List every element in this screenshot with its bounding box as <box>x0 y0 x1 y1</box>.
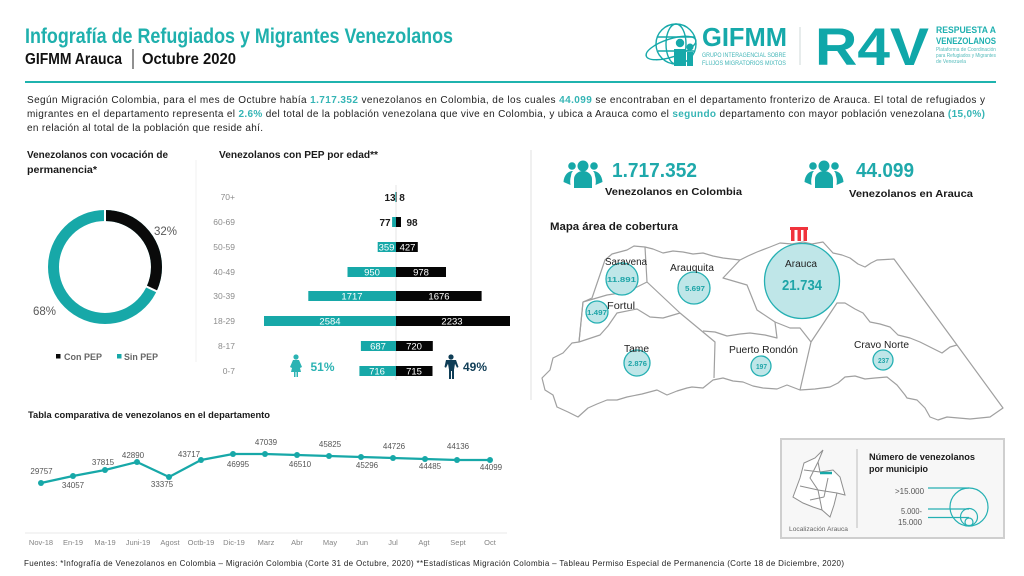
panel: tabla comparativa line chart <box>25 410 507 547</box>
x axis labels: Nov-18 <box>29 538 53 547</box>
legend labels: 5.000- <box>901 507 922 516</box>
bubble: Fortul: 1.497 <box>587 310 607 317</box>
subtitle: GIFMM Arauca <box>25 51 122 68</box>
icon: red gate landmark <box>790 227 808 241</box>
KPI value: 44.099 <box>856 160 914 182</box>
heading: Mapa área de cobertura <box>550 221 679 233</box>
panel: vocación de permanencia donut <box>27 150 177 363</box>
bar values: 687 <box>370 342 386 352</box>
age axis labels: 60-69 <box>213 217 235 227</box>
age axis labels: 50-59 <box>213 242 235 252</box>
legend heading line 2: por municipio <box>869 464 928 474</box>
KPI label: Venezolanos en Arauca <box>849 188 973 200</box>
bar values: 720 <box>406 342 422 352</box>
age axis labels: 70+ <box>221 192 235 202</box>
x axis labels: Jun <box>356 538 368 547</box>
logo caption line 2: FLUJOS MIGRATORIOS MIXTOS <box>702 60 787 67</box>
x axis labels: Agt <box>418 538 431 547</box>
map boundaries <box>542 242 1003 420</box>
locator caption: Localización Arauca <box>789 526 848 533</box>
logo text line 4: para Refugiados y Migrantes <box>936 53 996 59</box>
female bars <box>264 192 396 376</box>
heading: Venezolanos con vocación de <box>27 150 168 161</box>
bubble: Arauquita: 5.697 <box>685 286 705 293</box>
proportional circle key <box>928 488 988 526</box>
data labels: 42890 <box>122 451 145 460</box>
data labels <box>30 438 503 490</box>
icon: Colombia locator map <box>793 450 845 517</box>
heading line 2: permanencia* <box>27 165 97 176</box>
data labels: 29757 <box>30 467 53 476</box>
bar values: 427 <box>400 242 415 254</box>
bar values: 77 <box>379 218 391 229</box>
data labels: 37815 <box>92 458 115 467</box>
bubble: Fortul <box>586 301 635 323</box>
icon: woman <box>290 354 302 377</box>
intro paragraph: migrantes en el departamento representa el 2.6% del total de la población venezolana que vive en Colombia, y ubica a Arauca como el segundo departamento con mayor población venezolana (15,0%) <box>27 109 985 120</box>
donut legend: Sin PEP <box>124 352 159 363</box>
legend labels: 15.000 <box>898 518 923 527</box>
logo: GIFMM <box>643 22 787 67</box>
KPI: Venezolanos en Arauca <box>804 160 973 200</box>
x axis labels: Juni-19 <box>126 538 150 547</box>
data labels: 45296 <box>356 461 379 470</box>
bar values: 716 <box>369 366 385 378</box>
panel: mapa área de cobertura <box>542 221 1003 420</box>
male share: 49% <box>463 360 487 374</box>
bar values: 2233 <box>441 316 463 328</box>
legend labels: >15.000 <box>895 487 925 496</box>
KPI label: Venezolanos en Colombia <box>605 186 742 198</box>
logo text line 2: VENEZOLANOS <box>936 36 996 47</box>
intro paragraph: Según Migración Colombia, para el mes de Octubre había 1.717.352 venezolanos en Colombia, de los cuales 44.099 se encontraban en el departamento fronterizo de Arauca. El total de refugiados y <box>27 95 985 106</box>
icon: man <box>444 354 458 379</box>
data labels: 44726 <box>383 442 406 451</box>
bar values: 1717 <box>341 292 363 302</box>
bubble: Saravena <box>605 257 647 295</box>
data labels: 47039 <box>255 438 278 447</box>
heading: Tabla comparativa de venezolanos en el departamento <box>28 410 271 420</box>
x axis labels: Octb-19 <box>188 538 214 547</box>
x axis labels: May <box>323 538 337 547</box>
data labels: 46995 <box>227 460 250 469</box>
data labels: 44136 <box>447 442 470 451</box>
bubble: Arauca <box>764 244 840 318</box>
x axis labels: Abr <box>291 538 303 547</box>
bar values: 950 <box>364 268 380 278</box>
age axis labels <box>213 192 235 376</box>
logo wordmark: GIFMM <box>702 22 787 52</box>
heading: Venezolanos con PEP por edad** <box>219 150 378 161</box>
bubble: Arauquita <box>670 263 714 304</box>
icon: globe with family <box>643 24 699 66</box>
data labels: 44485 <box>419 462 442 471</box>
x axis labels: Marz <box>258 538 275 547</box>
bar values: 2584 <box>319 316 341 328</box>
bar values <box>319 193 463 378</box>
bubble: Tame: 2.876 <box>628 361 647 368</box>
data labels: 45825 <box>319 440 342 449</box>
data labels: 44099 <box>480 463 503 472</box>
title: Infografía de Refugiados y Migrantes Venezolanos <box>25 25 453 48</box>
label 32%: 32% <box>154 226 177 238</box>
KPI: Venezolanos en Colombia <box>564 160 742 198</box>
logo text line 5: de Venezuela <box>936 59 966 65</box>
bubble: Arauquita: Arauquita <box>670 263 714 274</box>
subtitle date: Octubre 2020 <box>142 51 236 68</box>
x axis labels: En-19 <box>63 538 83 547</box>
age axis labels: 0-7 <box>223 366 235 376</box>
bar values: 1676 <box>428 292 450 302</box>
donut chart <box>54 209 158 318</box>
bubble: Fortul: Fortul <box>607 301 635 312</box>
bubble: Arauca: Arauca <box>785 259 817 270</box>
data labels: 46510 <box>289 460 312 469</box>
age axis labels: 40-49 <box>213 267 235 277</box>
data line <box>41 454 490 483</box>
intro paragraph <box>27 95 985 134</box>
donut legend: Con PEP <box>64 352 103 363</box>
bubble: Cravo Norte: 237 <box>878 358 889 365</box>
logo text line 1: RESPUESTA A <box>936 25 996 36</box>
bar values: 978 <box>413 268 429 278</box>
female share: 51% <box>310 360 335 374</box>
bubble: Arauca: 21.734 <box>782 277 823 294</box>
bubble: Saravena: Saravena <box>605 257 647 268</box>
bubble: Cravo Norte <box>854 340 909 370</box>
bubble: Puerto Rondón: 197 <box>756 364 767 371</box>
icon: people group <box>804 160 844 188</box>
x axis labels: Agost <box>160 538 181 547</box>
x axis labels: Ma-19 <box>94 538 116 547</box>
bar values: 98 <box>406 218 418 229</box>
bubble: Cravo Norte: Cravo Norte <box>854 340 909 351</box>
data labels: 34057 <box>62 481 85 490</box>
bar values: 13 <box>384 193 396 204</box>
data points <box>38 451 493 486</box>
donut legend <box>56 352 159 363</box>
icon: people group <box>564 160 602 188</box>
legend labels <box>895 487 925 527</box>
x axis labels: Jul <box>388 538 398 547</box>
bar values: 359 <box>379 242 394 254</box>
logo caption line 1: GRUPO INTERAGENCIAL SOBRE <box>702 52 787 59</box>
label 68%: 68% <box>33 306 56 318</box>
male bars <box>396 192 510 376</box>
panel: PEP por edad pyramid chart <box>213 150 510 380</box>
bubble: Puerto Rondón: Puerto Rondón <box>729 345 798 356</box>
panel: map legend <box>781 439 1004 538</box>
bar values: 715 <box>406 366 422 378</box>
footer sources: Fuentes: *Infografía de Venezolanos en Colombia – Migración Colombia (Corte 31 de Octubre, 2020) **Estadísticas Migración Colombia – Tableau Permiso Especial de Permanencia (Corte 18 de Diciembre, 2020) <box>24 559 844 568</box>
data labels: 33375 <box>151 480 174 489</box>
intro paragraph: en relación al total de la población que reside ahí. <box>27 123 263 134</box>
x axis labels: Dic-19 <box>223 538 245 547</box>
KPI value: 1.717.352 <box>612 160 697 182</box>
age axis labels: 8-17 <box>218 341 235 351</box>
x axis labels: Sept <box>450 538 467 547</box>
age axis labels: 30-39 <box>213 291 235 301</box>
bubble: Tame: Tame <box>624 344 649 355</box>
bubble: Puerto Rondón <box>729 345 798 376</box>
logo mark: R4V <box>815 18 929 77</box>
age axis labels: 18-29 <box>213 316 235 326</box>
legend heading: Número de venezolanos <box>869 452 975 462</box>
bubble: Saravena: 11.891 <box>607 277 636 284</box>
header title block <box>25 25 453 69</box>
logo text line 3: Plataforma de Coordinación <box>936 47 996 53</box>
x axis labels <box>29 538 497 547</box>
x axis labels: Oct <box>484 538 497 547</box>
logo: R4V <box>815 18 996 77</box>
bubble: Tame <box>624 344 650 376</box>
data labels: 43717 <box>178 450 201 459</box>
bar values: 8 <box>399 193 405 204</box>
